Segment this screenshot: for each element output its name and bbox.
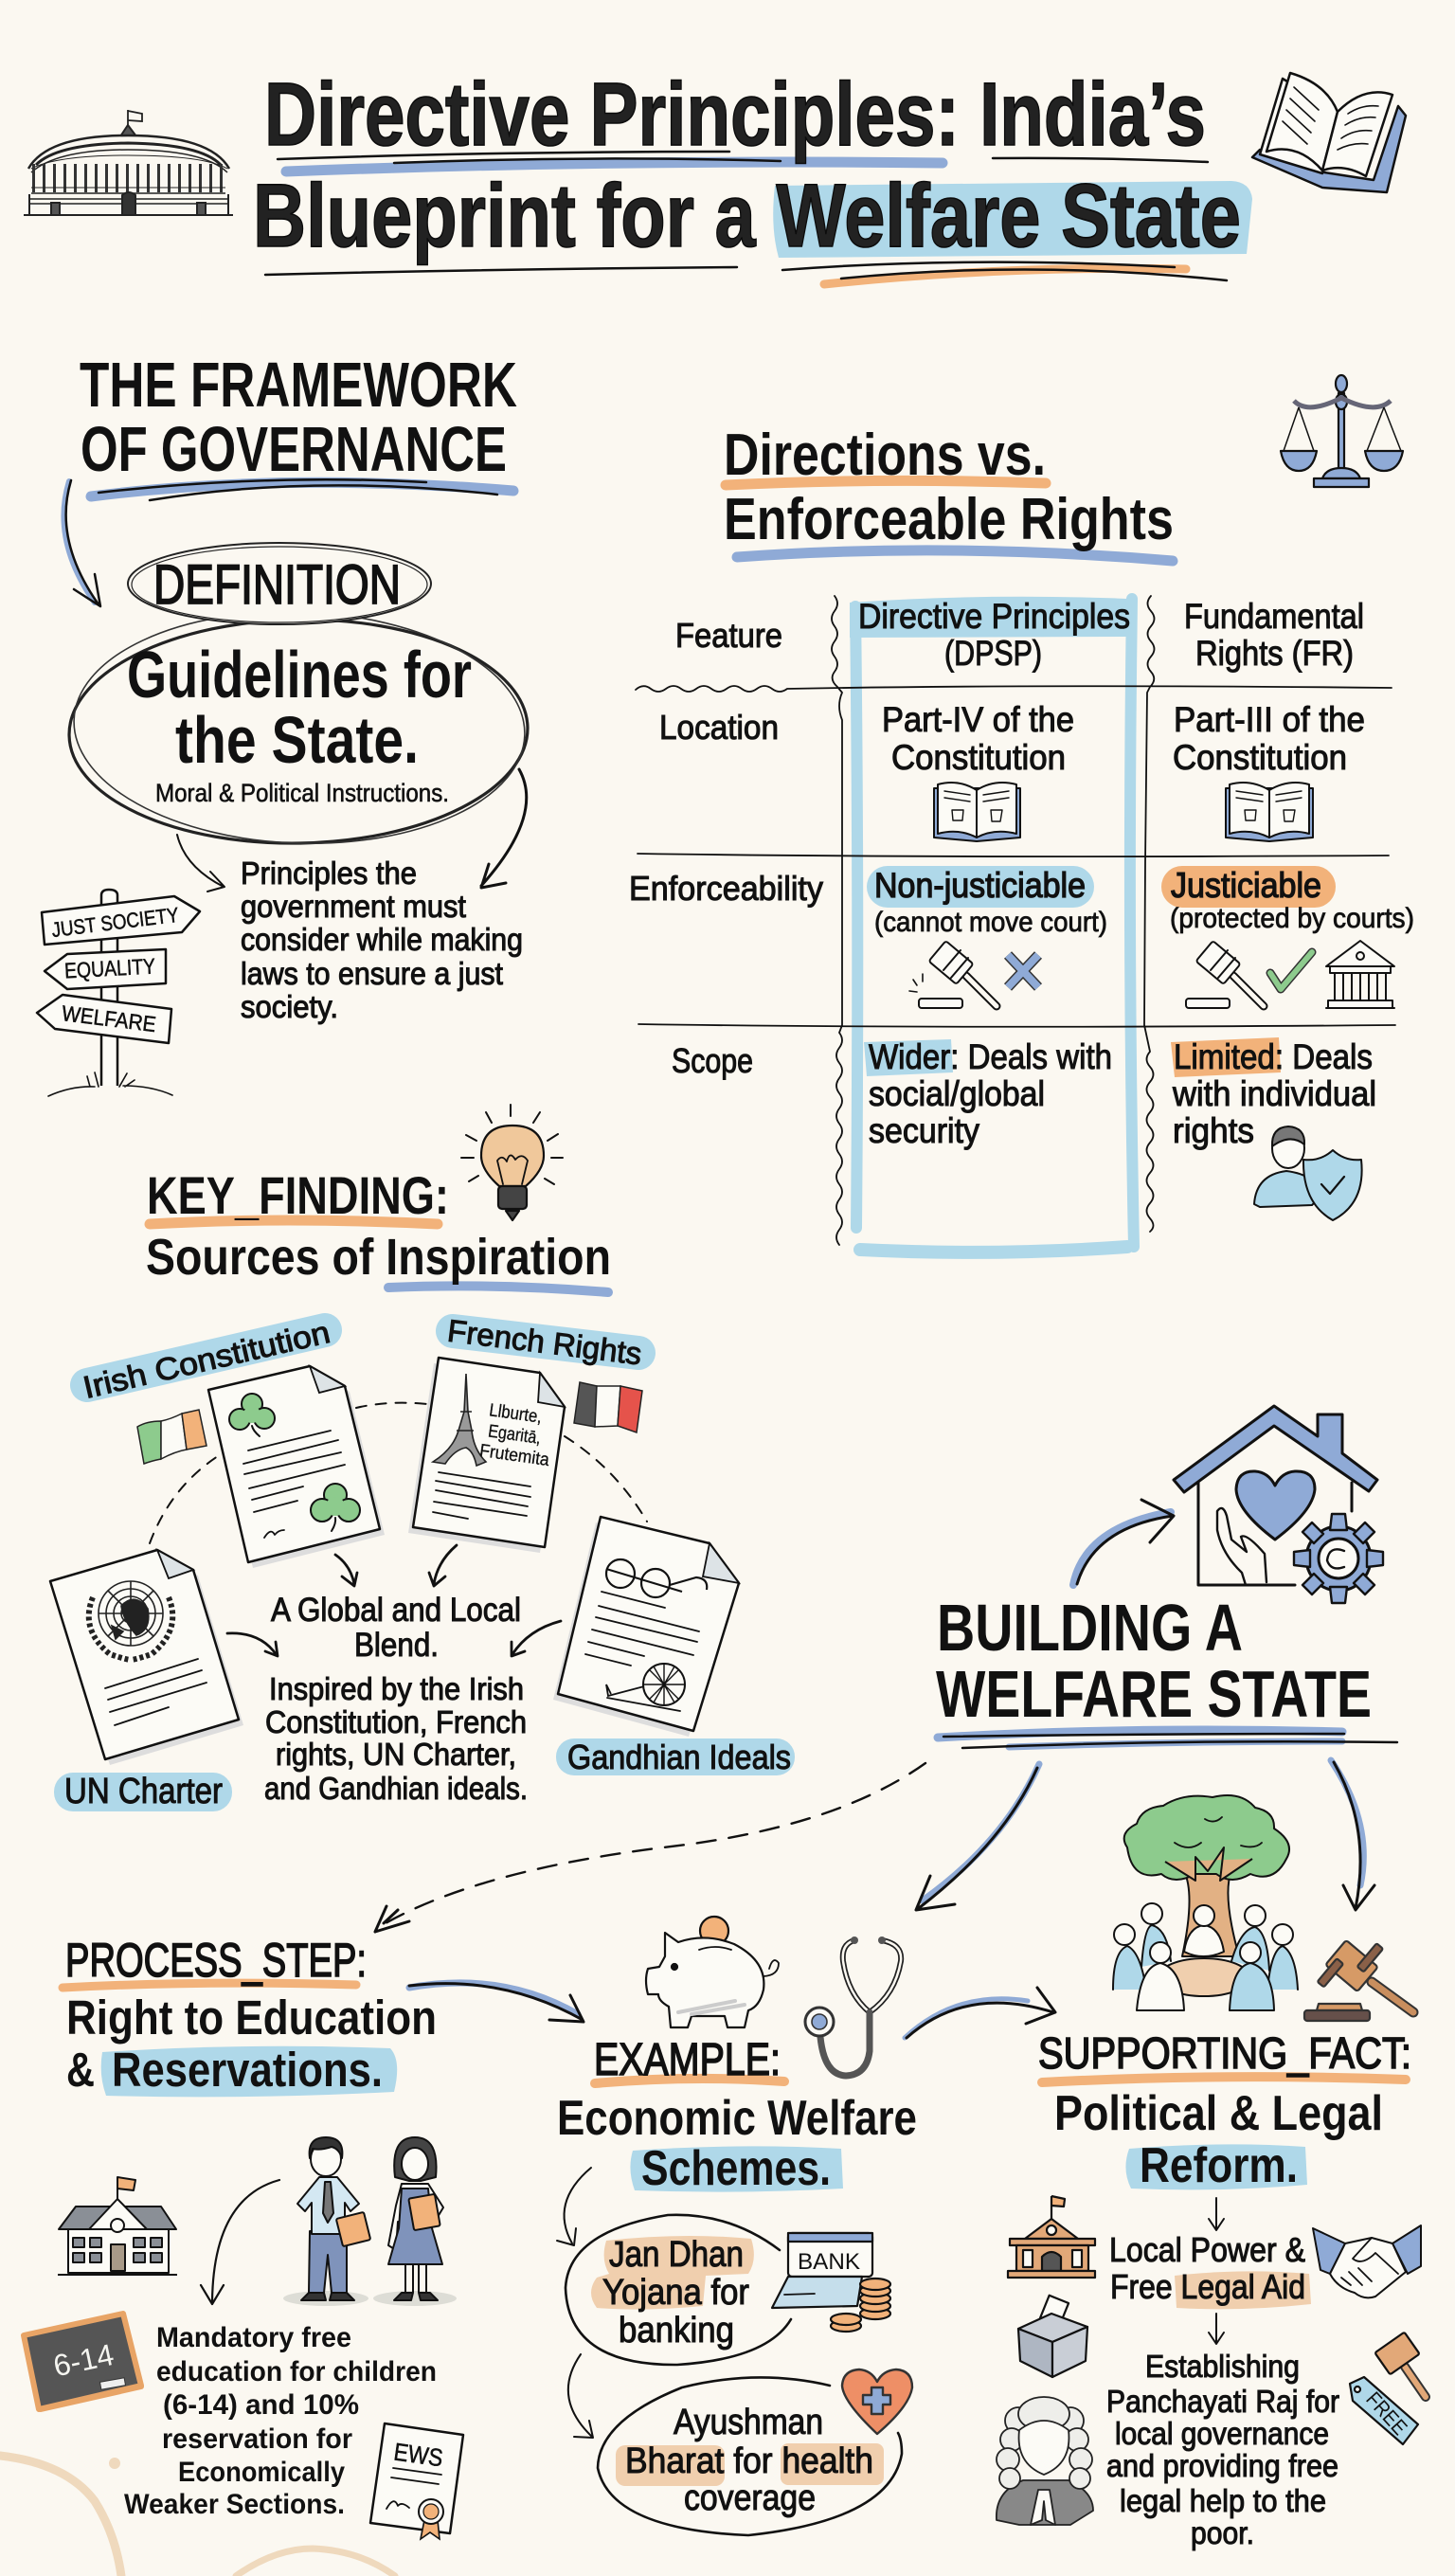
centre text: global and local blend: and Gandhian ideals. <box>264 1771 528 1806</box>
row: location: Constitution <box>891 738 1066 777</box>
table header row: Directive Principles <box>858 597 1130 636</box>
heading: directions vs enforceable rights: Directions vs. <box>724 423 1046 488</box>
panel: example, economic welfare schemes <box>557 1917 1055 2535</box>
row: location: Part-III of the <box>1174 700 1365 739</box>
table header row: (DPSP) <box>944 634 1042 673</box>
big oval <box>67 604 530 851</box>
arrows to centre <box>227 1545 561 1656</box>
text: establishing panchayati raj: Establishing <box>1145 2349 1300 2384</box>
text: establishing panchayati raj <box>1106 2349 1339 2550</box>
label: irish constitution: Irish Constitution <box>80 1314 333 1405</box>
heading: the framework of governance <box>80 350 517 500</box>
text: establishing panchayati raj: poor. <box>1191 2515 1254 2550</box>
arrow: to example <box>916 1764 1039 1910</box>
table header row: Feature <box>675 616 782 655</box>
icon: school <box>58 2177 177 2275</box>
icon: gavel with cross <box>909 941 1038 1008</box>
row: scope: Scope <box>672 1041 753 1080</box>
row: enforceability: (protected by courts) <box>1170 903 1414 934</box>
icon: ballot box <box>1018 2296 1087 2377</box>
row: scope <box>672 1037 1376 1220</box>
row: scope: social/global <box>869 1074 1045 1113</box>
text: principles explanation: consider while making <box>241 922 523 957</box>
heading: directions vs enforceable rights: Enforceable Rights <box>724 487 1174 552</box>
scheme: jan dhan yojana <box>566 2215 791 2365</box>
centre text: global and local blend <box>264 1592 528 1806</box>
icon: gear <box>1294 1514 1383 1603</box>
table grid <box>636 596 1395 1245</box>
text: principles explanation: society. <box>241 989 338 1024</box>
heading: example: Schemes. <box>641 2141 831 2196</box>
heading: example: EXAMPLE: <box>594 2035 781 2085</box>
french document motto: Egaritā, <box>487 1421 542 1449</box>
scheme: ayushman bharat <box>598 2377 902 2535</box>
row: location: Part-IV of the <box>882 700 1074 739</box>
icon: charkha wheel <box>606 1664 685 1705</box>
icon: chalkboard: 6-14 <box>50 2337 117 2383</box>
row: scope: rights <box>1173 1111 1254 1150</box>
row: location: Location <box>659 708 779 747</box>
icon: bank laptop and coins <box>772 2233 890 2332</box>
title line 2: Blueprint for a Welfare State <box>253 166 1241 266</box>
text: mandatory free education: education for children <box>156 2356 437 2387</box>
heading: supporting fact <box>1038 2028 1411 2193</box>
scheme: jan dhan yojana: Yojana for <box>602 2273 749 2313</box>
title line 1: Directive Principles: India’s <box>264 64 1206 165</box>
row: enforceability: Enforceability <box>629 869 823 908</box>
icon: judge with wig <box>997 2397 1093 2525</box>
icon: person with shield <box>1254 1126 1362 1220</box>
centre text: global and local blend: rights, UN Charter, <box>276 1737 516 1772</box>
icon: irish flag <box>137 1410 207 1464</box>
text: establishing panchayati raj: and providing free <box>1106 2448 1338 2483</box>
icon: chalkboard <box>24 2314 141 2409</box>
arrows from oval <box>177 769 527 892</box>
icon: eiffel tower <box>433 1374 486 1466</box>
icon: gavel and free tag <box>1350 2333 1426 2444</box>
icon: gavel and free tag: FREE <box>1361 2387 1412 2440</box>
label: gandhian ideals: Gandhian Ideals <box>567 1738 791 1776</box>
heading: process step <box>63 1934 437 2097</box>
heading: process step: Right to Education <box>66 1991 437 2045</box>
icon: tree with people <box>1113 1795 1298 2010</box>
icon: constitution book right <box>1226 783 1313 841</box>
icon: schoolboy <box>283 2137 370 2306</box>
definition oval: DEFINITION <box>153 554 401 616</box>
dpsp column highlight <box>850 597 1134 1252</box>
row: scope: Limited: Deals <box>1174 1037 1373 1076</box>
arrow: students to text <box>201 2180 279 2304</box>
text: local power and free legal aid: Free Legal Aid <box>1110 2267 1305 2306</box>
icon: gandhi glasses <box>606 1559 707 1597</box>
document: irish constitution <box>208 1366 385 1568</box>
title <box>253 64 1252 284</box>
text: local power and free legal aid: Local Power & <box>1109 2230 1305 2269</box>
text: principles explanation: Principles the <box>241 856 417 891</box>
label: french rights: French Rights <box>445 1313 643 1371</box>
heading: supporting fact: Political & Legal <box>1054 2086 1383 2141</box>
text: mandatory free education: (6-14) and 10% <box>163 2389 359 2421</box>
panel: process step, right to education <box>24 1934 584 2539</box>
icon: french flag <box>574 1382 642 1432</box>
scheme: jan dhan yojana: banking <box>619 2311 734 2351</box>
scheme: jan dhan yojana: Jan Dhan <box>609 2235 744 2275</box>
icon: town hall <box>1008 2196 1095 2278</box>
icon: bank laptop and coins: BANK <box>798 2249 860 2275</box>
dashed arrow: to process step <box>375 1763 925 1932</box>
coffee stains <box>0 2456 395 2576</box>
icon: ews certificate: EWS <box>392 2438 445 2472</box>
panel: directions vs enforceable rights <box>629 375 1414 1252</box>
row: scope: security <box>869 1111 979 1150</box>
panel: supporting fact, political and legal reform <box>997 2028 1426 2550</box>
title underline strokes <box>265 152 1227 284</box>
row: enforceability <box>629 866 1414 1008</box>
text: mandatory free education: Weaker Sections. <box>124 2489 345 2520</box>
row: enforceability: (cannot move court) <box>874 907 1107 938</box>
icon: open book <box>1252 73 1406 192</box>
icon: piggy bank <box>646 1917 779 2027</box>
definition oval <box>128 543 431 624</box>
document: un charter <box>50 1550 243 1765</box>
arrow: example to supporting fact <box>905 1988 1055 2038</box>
arrow: process to example <box>409 1983 584 2022</box>
text: principles explanation <box>241 856 523 1024</box>
icon: constitution book left <box>934 783 1020 841</box>
arrow: to house <box>1073 1500 1174 1585</box>
table header row <box>675 597 1364 673</box>
icon: signpost: WELFARE <box>61 1000 157 1036</box>
panel: framework of governance <box>37 350 530 1096</box>
heading: example <box>557 2035 917 2196</box>
heading: building a welfare state <box>936 1591 1397 1748</box>
icon: ews certificate <box>370 2423 463 2539</box>
icon: signpost: JUST SOCIETY <box>50 903 180 942</box>
text: mandatory free education: Mandatory free <box>156 2322 351 2353</box>
panel: building a welfare state <box>375 1406 1413 2021</box>
icon: stethoscope <box>805 1937 901 2076</box>
scheme: ayushman bharat: Ayushman <box>674 2403 823 2442</box>
text: local power and free legal aid <box>1109 2230 1311 2309</box>
panel: sources of inspiration <box>50 1105 795 1811</box>
icon: light bulb <box>461 1105 563 1220</box>
row: scope: with individual <box>1172 1074 1376 1113</box>
oval text: guidelines for the state: the State. <box>175 703 419 777</box>
heading: process step: Reservations. <box>112 2043 383 2097</box>
oval text: guidelines for the state: Guidelines for <box>127 638 472 712</box>
heading: the framework of governance: OF GOVERNANCE <box>81 414 507 485</box>
heading: building a welfare state: BUILDING A <box>937 1591 1243 1665</box>
icon: house with heart, hand and gear <box>1174 1406 1383 1603</box>
table header row: Fundamental <box>1184 597 1364 636</box>
centre text: global and local blend: Inspired by the Irish <box>269 1671 524 1706</box>
icon: heart with plus <box>842 2369 912 2434</box>
comparison table <box>629 596 1414 1252</box>
row: scope: Wider: Deals with <box>869 1037 1112 1076</box>
text: establishing panchayati raj: Panchayati Raj for <box>1106 2384 1339 2419</box>
heading: the framework of governance: THE FRAMEWORK <box>80 350 517 421</box>
centre text: global and local blend: Blend. <box>354 1627 439 1664</box>
document: french rights <box>408 1358 565 1553</box>
icon: wooden gavel <box>1304 1940 1413 2021</box>
oval text: guidelines for the state: Moral & Political Instructions. <box>155 779 449 807</box>
text: establishing panchayati raj: local governance <box>1115 2416 1329 2451</box>
oval text: guidelines for the state <box>127 638 472 807</box>
french document motto <box>478 1400 551 1470</box>
french document motto: Llburte, <box>488 1400 543 1428</box>
icon: handshake <box>1313 2225 1421 2297</box>
arrows: example to schemes <box>557 2168 593 2438</box>
arrow: to supporting fact <box>1331 1760 1374 1910</box>
text: mandatory free education: reservation for <box>162 2423 352 2455</box>
dashed connector arc <box>150 1403 647 1543</box>
text: establishing panchayati raj: legal help to the <box>1120 2483 1326 2518</box>
centre text: global and local blend: A Global and Local <box>271 1592 521 1629</box>
icon: signpost <box>37 890 200 1096</box>
heading: supporting fact: Reform. <box>1140 2138 1298 2193</box>
scheme: ayushman bharat: Bharat for health <box>625 2441 873 2481</box>
icon: gavel with check and court <box>1186 941 1394 1008</box>
heading: process step: & <box>66 2043 95 2097</box>
arrows: down <box>1209 2198 1224 2344</box>
text: principles explanation: laws to ensure a just <box>241 956 503 991</box>
icon: balance scales <box>1281 375 1403 487</box>
row: enforceability: Non-justiciable <box>874 866 1086 905</box>
document: gandhian ideals <box>553 1517 739 1737</box>
icon: schoolgirl <box>373 2137 457 2306</box>
text: principles explanation: government must <box>241 889 466 924</box>
title highlight: Welfare State <box>773 181 1252 258</box>
french document motto: Frutemita <box>478 1441 551 1470</box>
label: un charter: UN Charter <box>64 1772 223 1811</box>
heading: sources of inspiration: Sources of Inspiration <box>146 1229 611 1286</box>
heading: directions vs enforceable rights <box>724 423 1174 561</box>
centre text: global and local blend: Constitution, French <box>265 1704 527 1739</box>
row: enforceability: Justiciable <box>1171 866 1321 905</box>
icon: shamrock top <box>229 1394 275 1436</box>
heading: example: Economic Welfare <box>557 2091 917 2146</box>
arrow: heading to definition <box>63 480 100 606</box>
icon: un emblem <box>89 1581 172 1660</box>
heading: process step: PROCESS_STEP: <box>65 1934 367 1987</box>
table header row: Rights (FR) <box>1195 634 1354 673</box>
icon: parliament building <box>24 110 233 215</box>
scheme: ayushman bharat: coverage <box>684 2478 816 2518</box>
heading: key finding: KEY_FINDING: <box>147 1165 449 1225</box>
row: location: Constitution <box>1173 738 1347 777</box>
text: mandatory free education: Economically <box>178 2457 345 2488</box>
text: mandatory free education <box>124 2322 437 2520</box>
icon: signpost: EQUALITY <box>63 954 156 982</box>
row: location <box>659 700 1365 841</box>
icon: shamrock bottom <box>311 1484 360 1531</box>
